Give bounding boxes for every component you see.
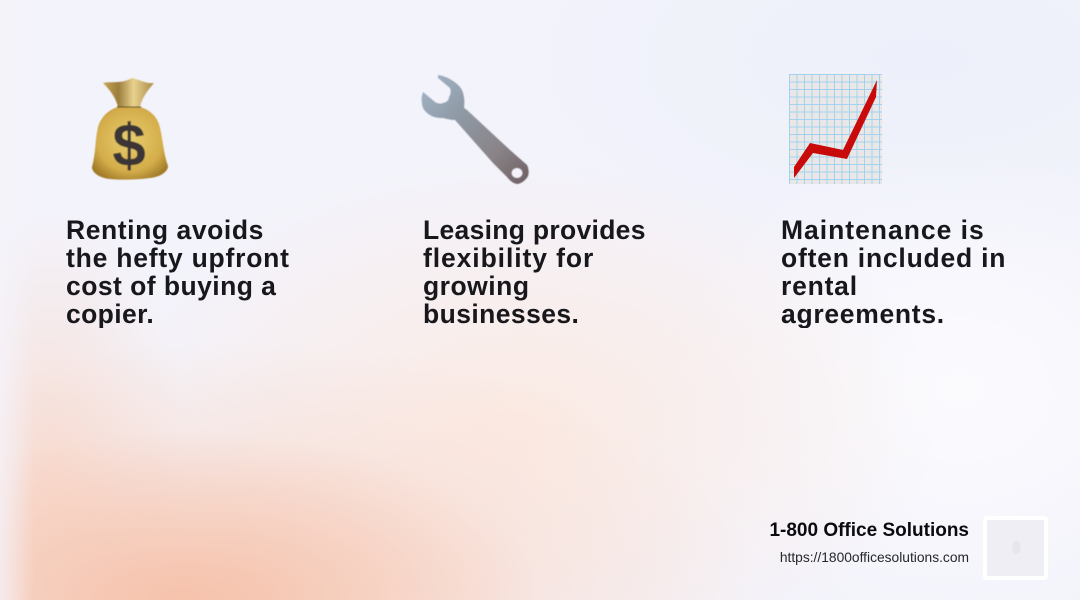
text: renting: the hefty upfront bbox=[66, 243, 290, 273]
text: renting bbox=[66, 216, 290, 328]
text: maintenance: rental bbox=[781, 271, 858, 301]
brand name: 1-800 Office Solutions bbox=[769, 520, 969, 541]
text: renting: cost of buying a bbox=[66, 271, 276, 301]
text: leasing: flexibility for bbox=[423, 243, 594, 273]
logo mark bbox=[1012, 541, 1021, 554]
text: maintenance: often included in bbox=[781, 243, 1006, 273]
icon: money bag: $ bbox=[112, 112, 146, 179]
text: maintenance bbox=[781, 216, 1006, 328]
text: leasing: growing bbox=[423, 271, 530, 301]
logo box bbox=[983, 516, 1048, 580]
text: leasing bbox=[423, 216, 646, 328]
website url: https://1800officesolutions.com bbox=[780, 550, 969, 565]
